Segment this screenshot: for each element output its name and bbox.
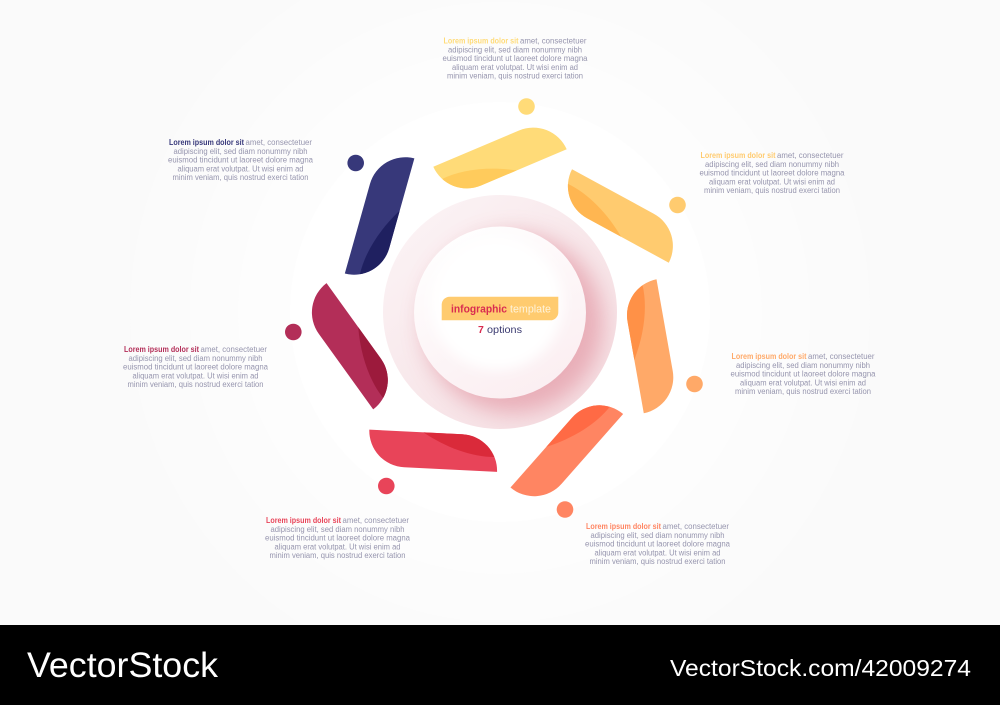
text block 2: adipiscing elit, sed diam nonummy nibh [705,160,839,169]
text block 7 [168,138,314,182]
dot 6 [285,324,302,340]
text block 3: minim veniam, quis nostrud exerci tation [735,387,871,396]
text block 1: adipiscing elit, sed diam nonummy nibh [448,45,582,54]
text block 6: aliquam erat volutpat. Ut wisi enim ad [132,371,258,380]
text block 7: minim veniam, quis nostrud exerci tation [172,173,308,182]
text block 1: euismod tincidunt ut laoreet dolore magna [442,54,588,63]
text block 5: amet, consectetuer [342,516,409,525]
petal 7 [344,157,414,275]
text block 7: amet, consectetuer [246,138,312,147]
center label [442,297,558,336]
text block 5: aliquam erat volutpat. Ut wisi enim ad [274,542,400,551]
text block 5 [265,516,411,560]
petal 2 [568,169,673,263]
text block 1: aliquam erat volutpat. Ut wisi enim ad [452,63,578,72]
text block 6: minim veniam, quis nostrud exerci tation [128,380,264,389]
text block 1 [442,36,588,81]
petal 1 [433,128,567,188]
text block 6 [123,345,269,389]
footer image id: VectorStock.com/42009274 [670,655,971,681]
text block 3: amet, consectetuer [808,352,875,361]
text block 2: amet, consectetuer [777,151,844,160]
text block 6: euismod tincidunt ut laoreet dolore magna [123,363,269,372]
text block 2 [700,151,845,195]
text block 6: adipiscing elit, sed diam nonummy nibh [128,354,262,363]
dot 4 [557,501,573,518]
text block 1: amet, consectetuer [520,36,587,46]
options word: options [487,324,522,336]
text block 5: Lorem ipsum dolor sit [266,516,341,525]
text block 3 [730,352,876,396]
text block 4: euismod tincidunt ut laoreet dolore magna [585,540,731,549]
text block 2: aliquam erat volutpat. Ut wisi enim ad [709,177,835,186]
text block 1: Lorem ipsum dolor sit [444,36,519,46]
label title: infographic [451,303,507,315]
text block 6: amet, consectetuer [200,345,267,354]
text block 4: amet, consectetuer [662,522,729,531]
dot 7 [347,155,364,171]
text block 3: adipiscing elit, sed diam nonummy nibh [736,361,870,370]
text block 3: Lorem ipsum dolor sit [732,352,807,361]
footer logo: VectorStock [27,646,219,685]
label badge [442,297,558,320]
text block 2: minim veniam, quis nostrud exerci tation [704,186,840,195]
text block 5: adipiscing elit, sed diam nonummy nibh [270,525,404,534]
label title second word: template [510,303,551,315]
text block 4: minim veniam, quis nostrud exerci tation [590,557,726,566]
text block 5: euismod tincidunt ut laoreet dolore magna [265,534,411,543]
text block 7: aliquam erat volutpat. Ut wisi enim ad [178,164,304,173]
text block 1: minim veniam, quis nostrud exerci tation [447,72,583,81]
text block 4: aliquam erat volutpat. Ut wisi enim ad [594,548,720,557]
text block 7: euismod tincidunt ut laoreet dolore magna [168,156,314,165]
text block 4 [585,522,731,566]
petal 4 [510,405,623,496]
text block 2: euismod tincidunt ut laoreet dolore magna [700,169,845,178]
text block 3: aliquam erat volutpat. Ut wisi enim ad [740,378,866,387]
options count: 7 [478,324,484,336]
text block 2: Lorem ipsum dolor sit [700,151,776,160]
dot 2 [669,197,686,213]
text block 3: euismod tincidunt ut laoreet dolore magna [730,370,876,379]
dot 1 [518,98,535,115]
text block 7: adipiscing elit, sed diam nonummy nibh [174,147,308,156]
dot 3 [686,376,703,392]
petal 3 [627,279,674,414]
text block 4: Lorem ipsum dolor sit [586,522,661,531]
petal 6 [312,283,388,410]
text block 4: adipiscing elit, sed diam nonummy nibh [590,531,724,540]
text block 5: minim veniam, quis nostrud exerci tation [270,551,406,560]
dot 5 [378,478,395,494]
center circle [383,195,617,429]
text block 6: Lorem ipsum dolor sit [124,345,199,354]
footer bar [0,625,1000,705]
text block 7: Lorem ipsum dolor sit [169,138,244,147]
petal 5 [369,430,498,472]
